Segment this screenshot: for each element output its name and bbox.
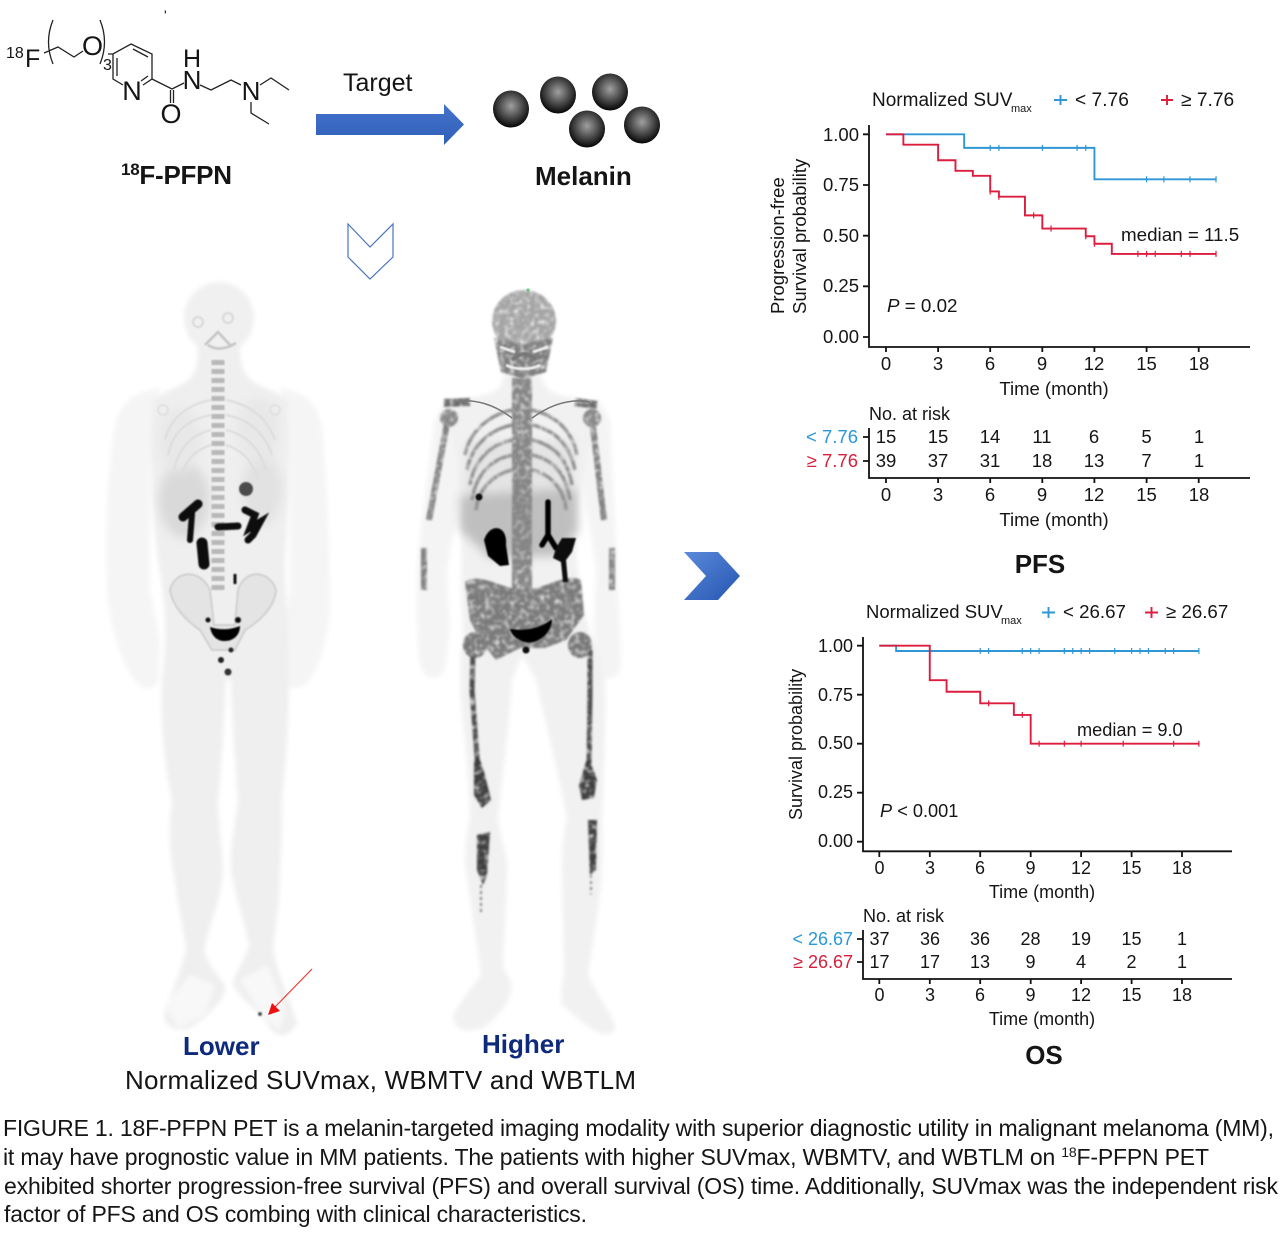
arrow: target (316, 104, 464, 145)
risk table: 14 (980, 426, 1000, 447)
figure caption: 18 (1061, 1144, 1077, 1160)
label: 18F-PFPN: 18 (121, 160, 140, 179)
axes (863, 125, 1250, 352)
x axis tick labels (881, 353, 1209, 374)
y axis tick labels: 0.00 (818, 831, 853, 851)
y axis tick labels: 0.00 (823, 326, 859, 347)
legend: ≥ 26.67 (1166, 601, 1228, 622)
y axis tick labels (823, 124, 859, 347)
figure caption: factor of PFS and OS combing with clinical characteristics. (4, 1201, 587, 1227)
survival curves (879, 646, 1199, 747)
x axis tick labels: 18 (1189, 353, 1209, 374)
annotation: median: median = 11.5 (1121, 224, 1239, 245)
risk table: 15 (928, 426, 948, 447)
legend: < 7.76 (1075, 90, 1129, 111)
chemical structure of 18F-PFPN: N (183, 65, 201, 95)
y axis title: Progression-free (767, 177, 788, 314)
annotation: p value: P = 0.02 (887, 295, 958, 316)
risk table: 0 (874, 985, 885, 1005)
risk table: 9 (1025, 952, 1036, 972)
risk table (792, 906, 1232, 1029)
x axis tick labels: 9 (1025, 858, 1036, 878)
y axis tick labels: 0.50 (823, 225, 859, 246)
chemical structure of 18F-PFPN: O (82, 31, 103, 61)
x axis title: Time (month) (999, 378, 1109, 399)
x axis tick labels: 9 (1037, 353, 1047, 374)
chemical structure of 18F-PFPN (6, 20, 289, 129)
label: normalized metrics: Normalized SUVmax, WBMTV and WBTLM (125, 1065, 636, 1095)
risk table: 1 (1194, 426, 1204, 447)
x axis tick labels: 18 (1172, 858, 1192, 878)
legend: Normalized SUV (872, 90, 1013, 111)
melanin spheres (493, 74, 660, 148)
risk table: 36 (920, 929, 940, 949)
y axis title: Survival probability (786, 669, 806, 820)
x axis tick labels: 3 (933, 353, 943, 374)
x axis tick labels: 0 (881, 353, 891, 374)
legend: max (1001, 615, 1022, 627)
annotation: median: median = 9.0 (1077, 720, 1183, 740)
legend: max (1011, 103, 1032, 115)
risk table: 12 (1084, 484, 1104, 505)
risk table: 18 (1172, 985, 1192, 1005)
label: Lower: Lower (183, 1031, 260, 1061)
y axis tick labels: 0.25 (818, 782, 853, 802)
risk table: 28 (1020, 929, 1041, 949)
figure caption (3, 1115, 1278, 1227)
risk table: 19 (1071, 929, 1091, 949)
risk table: ≥ 7.76 (807, 450, 858, 471)
figure caption: it may have prognostic value in MM patients. The patients with higher SUVmax, WBMTV, and WBTLM on (3, 1144, 1055, 1170)
chemical structure of 18F-PFPN: 3 (103, 57, 112, 74)
risk table: 11 (1032, 426, 1052, 447)
chemical structure of 18F-PFPN: O (160, 99, 182, 129)
x axis tick labels: 12 (1071, 858, 1091, 878)
risk table: 0 (881, 484, 891, 505)
PET image: higher uptake patient (417, 288, 621, 1034)
risk table: No. at risk (869, 404, 951, 424)
risk table (806, 404, 1250, 530)
stray mark: ' (164, 7, 167, 23)
heading: PFS: PFS (1015, 549, 1065, 579)
uptake marker on skull (526, 288, 530, 292)
chemical structure of 18F-PFPN: N (242, 76, 260, 106)
facial bone highlights (500, 347, 548, 369)
risk table: 15 (1121, 929, 1142, 949)
risk table: 3 (933, 484, 943, 505)
clavicles (455, 401, 590, 418)
skeleton (424, 378, 612, 912)
chemical structure of 18F-PFPN: N (122, 76, 142, 106)
liver and abdomen (158, 398, 282, 538)
heading: OS: OS (1025, 1040, 1063, 1070)
y axis tick labels: 0.75 (823, 174, 859, 195)
high uptake organs (476, 494, 576, 654)
risk table: < 26.67 (792, 929, 853, 949)
risk table: No. at risk (863, 906, 945, 926)
x axis tick labels (874, 858, 1192, 878)
risk table: 13 (1084, 450, 1104, 471)
risk table: 1 (1194, 450, 1204, 471)
legend (866, 601, 1228, 627)
risk table: 4 (1076, 952, 1086, 972)
y axis tick labels: 1.00 (818, 636, 853, 656)
y axis tick labels: 0.75 (818, 685, 853, 705)
risk table: 6 (1089, 426, 1099, 447)
risk table: 9 (1037, 484, 1047, 505)
figure caption: F-PFPN PET (1076, 1144, 1209, 1170)
risk table: Time (month) (999, 509, 1109, 530)
x axis tick labels: 15 (1136, 353, 1157, 374)
risk table: ≥ 26.67 (793, 952, 853, 972)
annotation: p value: P < 0.001 (880, 801, 958, 821)
risk table: 18 (1189, 484, 1209, 505)
risk table: 15 (1136, 484, 1157, 505)
risk table: 18 (1032, 450, 1052, 471)
x axis tick labels: 0 (874, 858, 885, 878)
silhouette (106, 282, 330, 1035)
label: Melanin: Melanin (535, 161, 632, 191)
risk table: 15 (1121, 985, 1142, 1005)
figure caption: FIGURE 1. 18F-PFPN PET is a melanin-targeted imaging modality with superior diagnostic utility in malignant melanoma (MM), (3, 1115, 1274, 1141)
label: 18F-PFPN: F-PFPN (139, 160, 232, 190)
risk table: 6 (985, 484, 995, 505)
figure caption: exhibited shorter progression-free survival (PFS) and overall survival (OS) time. Additionally, SUVmax was the independent risk (4, 1173, 1278, 1199)
risk table: 5 (1141, 426, 1152, 447)
risk table: 3 (925, 985, 935, 1005)
risk table: 2 (1126, 952, 1137, 972)
arrow: chevron down (348, 224, 393, 279)
risk table: 9 (1025, 985, 1036, 1005)
risk table: < 7.76 (806, 426, 858, 447)
risk table: 36 (970, 929, 990, 949)
axes (857, 637, 1232, 857)
survival curves (886, 134, 1216, 257)
arrow: chevron right (684, 552, 740, 600)
panel: PFS chart (767, 90, 1250, 579)
risk table: 15 (876, 426, 896, 447)
y axis tick labels: 0.50 (818, 733, 853, 753)
chemical structure of 18F-PFPN: 18 (6, 45, 24, 62)
arrow: red pointer to lesion (268, 969, 312, 1015)
x axis tick labels: 6 (975, 858, 985, 878)
chemical structure of 18F-PFPN: F (25, 45, 40, 73)
risk table: 7 (1141, 450, 1152, 471)
y axis tick labels: 1.00 (823, 124, 859, 145)
risk table: 31 (980, 450, 1000, 471)
silhouette (417, 375, 621, 1034)
PET image: lower uptake patient (106, 282, 330, 1035)
chemical structure of 18F-PFPN: H (183, 45, 201, 73)
legend: ≥ 7.76 (1181, 90, 1234, 111)
pelvis and spine (158, 313, 280, 650)
risk table: 17 (920, 952, 940, 972)
abdomen (460, 440, 578, 558)
risk table: 1 (1177, 952, 1187, 972)
risk table: 12 (1071, 985, 1091, 1005)
risk table: 1 (1177, 929, 1187, 949)
legend (872, 90, 1234, 115)
y axis title (767, 158, 810, 314)
risk table: 37 (928, 450, 948, 471)
risk table: 37 (869, 929, 890, 949)
x axis tick labels: 6 (985, 353, 995, 374)
panel: tracer targets melanin (6, 7, 660, 191)
high uptake organs (183, 482, 262, 1016)
risk table: 39 (876, 450, 896, 471)
skull (492, 290, 556, 379)
risk table: 6 (975, 985, 985, 1005)
x axis title: Time (month) (989, 882, 1095, 902)
legend: < 26.67 (1063, 601, 1126, 622)
y axis tick labels (818, 636, 853, 851)
y axis tick labels: 0.25 (823, 275, 859, 296)
x axis tick labels: 3 (925, 858, 935, 878)
x axis tick labels: 15 (1121, 858, 1142, 878)
y axis title: Survival probability (789, 158, 810, 314)
x axis tick labels: 12 (1084, 353, 1104, 374)
risk table: 17 (869, 952, 890, 972)
risk table: Time (month) (989, 1009, 1095, 1029)
label: Target: Target (343, 69, 413, 97)
label: Higher: Higher (482, 1029, 564, 1059)
risk table: 13 (970, 952, 990, 972)
legend: Normalized SUV (866, 601, 1003, 622)
panel: OS chart (786, 601, 1232, 1070)
